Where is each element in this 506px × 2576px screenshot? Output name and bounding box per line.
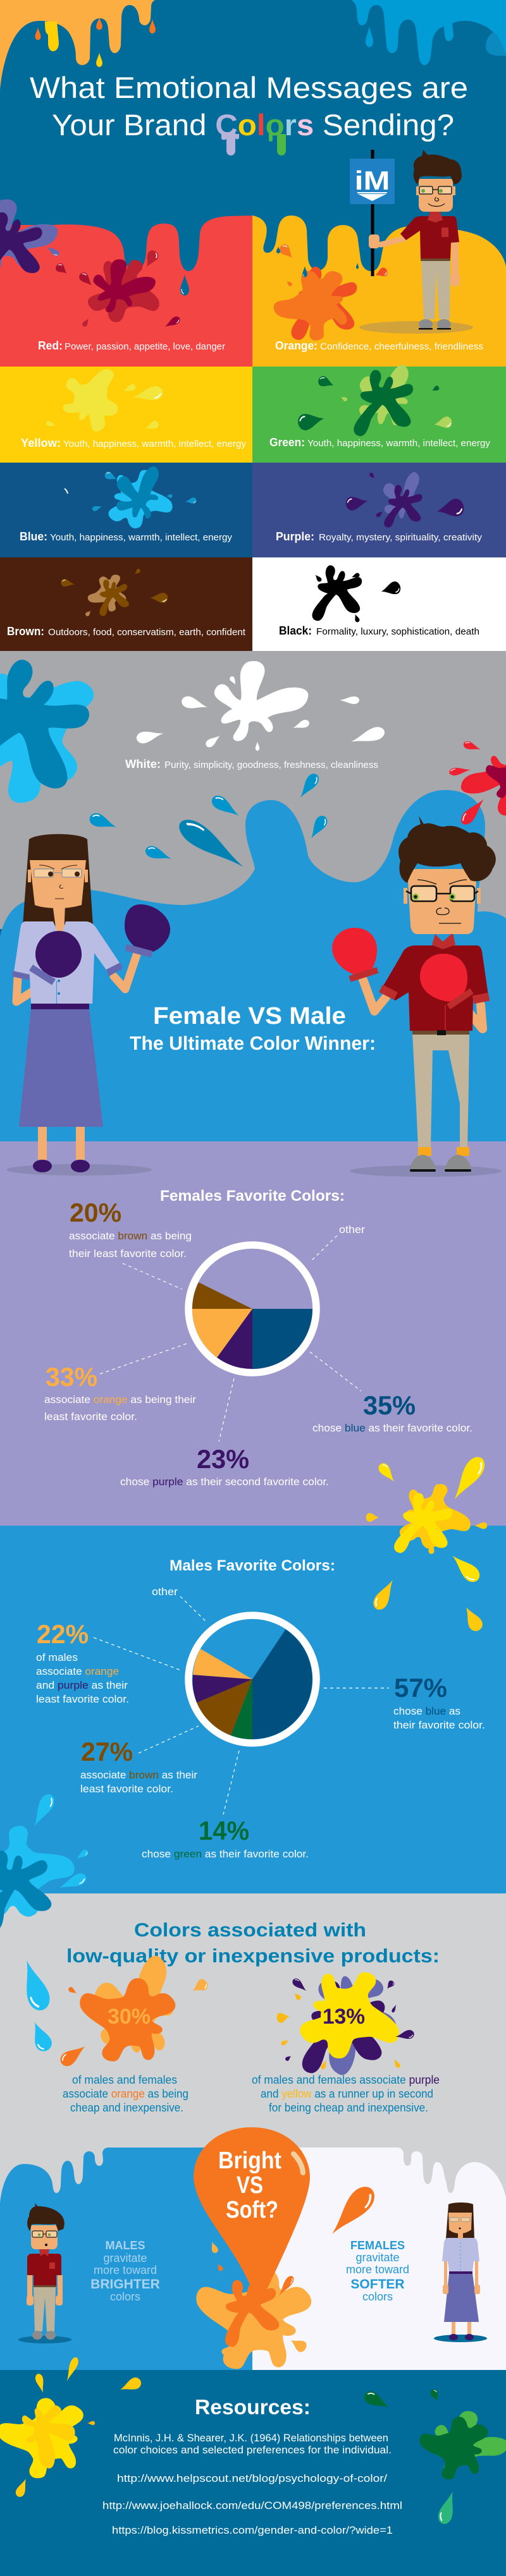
big orange drop with heading: VS xyxy=(237,2172,263,2199)
flying droplets on gray xyxy=(88,740,488,876)
label: other: other xyxy=(339,1224,365,1236)
shirt xyxy=(400,216,459,258)
stat: 14% green: 14% xyxy=(199,1816,249,1845)
females gravitate text: FEMALES xyxy=(350,2239,405,2252)
stat: 33% orange: 33% xyxy=(46,1362,97,1392)
section: low-quality or inexpensive xyxy=(16,1919,440,2114)
blue droplets xyxy=(65,470,197,512)
references xyxy=(102,2432,402,2536)
blue paint splat xyxy=(102,454,177,533)
purple label: Purple: xyxy=(276,530,314,543)
orange splat with 30%: 30% xyxy=(108,2005,151,2029)
blue paint wave xyxy=(0,790,506,1141)
shoes xyxy=(419,319,451,330)
stat: 20% brown: 20% xyxy=(70,1198,121,1227)
glove bands xyxy=(350,970,472,1007)
blue splat left xyxy=(0,641,117,821)
blue droplets xyxy=(16,1957,54,2054)
shadow xyxy=(359,321,473,334)
glove bands xyxy=(31,947,152,982)
yellow splat between sections xyxy=(366,1453,489,1634)
heading: female vs male: The Ultimate Color Winner: xyxy=(130,1032,376,1054)
light orange splat xyxy=(196,2269,311,2369)
hair xyxy=(446,2202,474,2239)
stat: 20% brown: associate brown as being xyxy=(69,1230,192,1242)
panel: white on gray xyxy=(0,641,506,929)
males gravitate text xyxy=(90,2239,160,2303)
label: other: other xyxy=(152,1586,178,1598)
orange panel droplets xyxy=(276,243,388,287)
stat: 57% blue: 57% xyxy=(394,1673,447,1703)
stat: 23% purple: chose purple as their second favorite color. xyxy=(120,1476,329,1488)
description: orange: associate orange as being xyxy=(63,2087,188,2100)
white label: Purity, simplicity, goodness, freshness, cleanliness xyxy=(164,760,378,770)
yellow paint splat xyxy=(59,363,125,434)
shoes xyxy=(33,1160,90,1172)
females gravitate text: SOFTER xyxy=(350,2277,405,2292)
panel: black xyxy=(252,557,506,651)
collar xyxy=(432,933,455,949)
glasses xyxy=(450,2218,470,2221)
skirt xyxy=(19,1009,103,1127)
males gravitate text: more toward xyxy=(94,2264,157,2276)
green label: Green: xyxy=(269,436,305,449)
hair xyxy=(398,816,496,883)
description: orange: of males and females xyxy=(72,2074,177,2086)
title: Your Brand Colors Sending? xyxy=(52,108,454,142)
red label: Power, passion, appetite, love, danger xyxy=(65,342,225,352)
shadow under male xyxy=(350,1165,502,1177)
purple paint splat xyxy=(373,462,436,528)
arms xyxy=(363,980,386,1011)
legs xyxy=(421,260,450,319)
heading: Colors associated with xyxy=(134,1919,366,1941)
males gravitate text: colors xyxy=(110,2290,140,2303)
stat: 27% brown xyxy=(80,1737,197,1795)
pie chart: females xyxy=(188,1245,316,1373)
green splat xyxy=(417,2406,506,2483)
brows, nose and mouth xyxy=(417,880,467,923)
stat: 22% orange and purple: and purple as their xyxy=(36,1679,128,1691)
stat: 14% green xyxy=(142,1816,309,1860)
stat: 27% brown: associate brown as their xyxy=(80,1769,197,1781)
purple label: Royalty, mystery, spirituality, creativity xyxy=(319,533,483,543)
description: orange xyxy=(63,2074,188,2114)
shoes xyxy=(410,1155,471,1172)
references: https://blog.kissmetrics.com/gender-and-color/?wide=1 xyxy=(112,2524,393,2536)
stat: 14% green: chose green as their favorite color. xyxy=(142,1848,309,1860)
heading: female vs male xyxy=(130,1003,376,1054)
blouse xyxy=(442,2238,479,2271)
black paint splat xyxy=(312,566,362,621)
belt xyxy=(412,1030,469,1035)
yellow label xyxy=(21,437,247,449)
green droplets xyxy=(362,2388,459,2526)
stat: 20% brown: their least favorite color. xyxy=(69,1248,187,1260)
blue label xyxy=(20,530,233,543)
red paint splat xyxy=(88,259,159,322)
stat: 22% orange and purple: associate orange xyxy=(36,1665,119,1677)
face xyxy=(419,179,453,212)
trousers xyxy=(412,1034,469,1147)
shoes xyxy=(449,2334,474,2340)
brown label: Outdoors, food, conservatism, earth, confident xyxy=(48,628,245,638)
orange splat with 30% xyxy=(76,1938,202,2070)
white droplets xyxy=(135,676,386,751)
glasses xyxy=(34,869,82,877)
references: http://www.helpscout.net/blog/psychology-of-color/ xyxy=(117,2472,387,2484)
panel: soft side xyxy=(252,2148,506,2370)
description: purple and yellow: for being cheap and inexpensive. xyxy=(269,2101,428,2114)
brown droplets xyxy=(60,568,168,617)
big orange drop with heading: Soft? xyxy=(226,2197,278,2223)
stat: 57% blue: chose blue as xyxy=(393,1705,460,1717)
arms xyxy=(443,2261,480,2294)
glasses xyxy=(419,186,452,194)
panel: females favorite colors background xyxy=(0,1141,506,1526)
yellow and purple splat with 13%: 13% xyxy=(323,2005,365,2029)
stat: 33% orange: associate orange as being their xyxy=(44,1394,196,1406)
white label: White: xyxy=(125,758,161,770)
shirt xyxy=(379,945,488,1031)
yellow and purple splat with 13% xyxy=(293,1962,409,2087)
title: What Emotional Messages are xyxy=(30,71,468,104)
legs xyxy=(452,2321,455,2335)
big orange drop with heading xyxy=(194,2127,310,2310)
sign board: iM xyxy=(354,166,390,195)
orange label: Confidence, cheerfulness, friendliness xyxy=(320,342,483,352)
red label xyxy=(38,339,225,352)
blue splat bottom left xyxy=(0,1811,85,1935)
section: low-quality colors background xyxy=(0,1893,506,2370)
belt xyxy=(31,1004,89,1009)
blue paint drip top right xyxy=(352,0,506,65)
black label: Black: xyxy=(279,624,312,637)
stat: 27% brown: 27% xyxy=(81,1737,133,1766)
shoes xyxy=(32,2331,56,2340)
references: color choices and selected preferences for the individual. xyxy=(113,2444,392,2456)
sign pole xyxy=(371,150,374,276)
purple label xyxy=(276,530,483,543)
legs xyxy=(34,2287,56,2331)
stat: 22% orange and purple: of males xyxy=(36,1651,78,1663)
head xyxy=(448,2213,472,2233)
section: females favorite colors xyxy=(44,1188,472,1488)
socks xyxy=(418,1147,469,1156)
brows, nose and mouth xyxy=(39,865,77,899)
black label xyxy=(279,624,479,637)
stat: 35% blue: 35% xyxy=(363,1390,416,1420)
brown label xyxy=(7,625,245,638)
panel: green xyxy=(252,351,506,463)
title xyxy=(30,71,468,142)
panel: red xyxy=(0,199,252,367)
stat: 33% orange xyxy=(44,1362,196,1423)
panel: blue xyxy=(0,454,252,557)
description: purple and yellow: of males and females associate purple xyxy=(252,2074,440,2086)
stat: 27% brown: least favorite color. xyxy=(80,1783,173,1795)
male boxer xyxy=(332,816,496,1172)
orange droplets xyxy=(58,1978,209,2069)
arm left xyxy=(381,239,404,245)
eyes xyxy=(413,894,455,899)
boxing gloves xyxy=(332,928,467,1002)
panel: purple xyxy=(252,462,506,557)
panel: brown xyxy=(0,557,252,651)
males gravitate text: MALES xyxy=(105,2239,145,2252)
green droplets xyxy=(297,372,453,432)
small female figure xyxy=(434,2202,487,2342)
green label: Youth, happiness, warmth, intellect, energy xyxy=(307,439,491,449)
description: orange: cheap and inexpensive. xyxy=(70,2101,183,2114)
orange label xyxy=(275,339,483,352)
collar xyxy=(428,212,443,222)
cuffs xyxy=(381,988,489,1000)
nose and mouth xyxy=(428,197,445,206)
panel: yellow xyxy=(0,363,252,463)
dark orange splat xyxy=(215,2274,284,2348)
hair xyxy=(23,834,93,925)
females gravitate text: more toward xyxy=(346,2263,409,2276)
red splat right xyxy=(461,748,506,816)
females gravitate text: colors xyxy=(362,2290,393,2303)
stat: 57% blue xyxy=(393,1673,485,1731)
yellow droplets xyxy=(46,374,164,432)
neck xyxy=(52,904,65,937)
orange paint drip top left xyxy=(0,0,156,90)
heading: female vs male: Female VS Male xyxy=(153,1003,346,1030)
orange droplets xyxy=(209,2182,380,2357)
background: dark blue header xyxy=(0,0,506,379)
title paint drips xyxy=(221,133,286,155)
arms xyxy=(27,2275,63,2306)
section: males favorite colors xyxy=(28,1557,485,1893)
panel: males favorite colors background xyxy=(0,1526,506,1893)
glasses xyxy=(406,886,478,901)
females gravitate text: gravitate xyxy=(355,2251,400,2264)
brown paint splat xyxy=(82,568,134,619)
blouse xyxy=(14,921,120,1004)
man holding IM sign xyxy=(350,150,473,334)
stat: 23% purple xyxy=(120,1444,329,1488)
legs xyxy=(38,1125,47,1160)
panel: resources xyxy=(0,2356,506,2576)
description: purple and yellow xyxy=(252,2074,440,2114)
females gravitate text xyxy=(346,2239,409,2303)
boxing gloves xyxy=(35,904,170,978)
leader lines xyxy=(100,1236,361,1442)
female boxer xyxy=(12,834,170,1172)
stat: 35% blue xyxy=(312,1390,472,1434)
face xyxy=(30,860,86,908)
males gravitate text: BRIGHTER xyxy=(90,2277,160,2292)
panel: orange xyxy=(252,216,506,367)
description: purple and yellow: and yellow as a runner up in second xyxy=(261,2087,433,2100)
cuffs xyxy=(12,963,123,980)
shirt xyxy=(27,2254,61,2287)
heading xyxy=(66,1919,440,1967)
shadow under female xyxy=(6,1164,152,1176)
stat: 35% blue: chose blue as their favorite color. xyxy=(312,1422,472,1434)
purple droplets xyxy=(345,472,466,520)
black label: Formality, luxury, sophistication, death xyxy=(316,627,479,637)
panel: bright side xyxy=(0,2148,252,2370)
stat: 23% purple: 23% xyxy=(197,1444,249,1474)
stat: 22% orange and purple xyxy=(36,1619,129,1705)
references: McInnis, J.H. & Shearer, J.K. (1964) Relationships between xyxy=(114,2432,388,2444)
leader lines xyxy=(94,1596,389,1814)
purple paint splat xyxy=(0,199,58,283)
yellow and purple droplets xyxy=(276,1977,415,2070)
head xyxy=(31,2225,58,2249)
arms xyxy=(16,978,43,1002)
skirt xyxy=(444,2273,479,2322)
black droplets xyxy=(314,573,402,623)
heading: low-quality or inexpensive products: xyxy=(66,1945,440,1967)
yellow label: Yellow: xyxy=(21,437,61,449)
stat: 20% brown xyxy=(69,1198,192,1260)
blue label: Youth, happiness, warmth, intellect, energy xyxy=(50,533,233,543)
white paint splat xyxy=(214,661,308,741)
stat: 57% blue: their favorite color. xyxy=(393,1719,485,1731)
pie chart: males xyxy=(188,1615,316,1743)
green label xyxy=(269,436,491,449)
orange paint splat xyxy=(265,257,364,352)
heading: Resources: xyxy=(195,2395,311,2419)
yellow droplets xyxy=(14,2356,143,2498)
face xyxy=(407,869,477,934)
stat: 22% orange and purple: least favorite color. xyxy=(36,1693,129,1705)
orange label: Orange: xyxy=(275,339,318,352)
heading: Males Favorite Colors: xyxy=(170,1557,335,1574)
yellow label: Youth, happiness, warmth, intellect, energy xyxy=(63,439,247,449)
stat: 33% orange: least favorite color. xyxy=(44,1411,137,1423)
hair xyxy=(414,150,462,185)
stat: 22% orange and purple: 22% xyxy=(37,1619,89,1649)
green paint splat xyxy=(345,351,429,437)
white label xyxy=(125,758,378,770)
blue droplets xyxy=(28,1792,89,1893)
small male figure xyxy=(18,2203,71,2343)
big orange drop with heading: Bright xyxy=(218,2148,281,2174)
glasses xyxy=(32,2231,57,2237)
brown label: Brown: xyxy=(7,625,44,638)
yellow droplets xyxy=(366,1453,489,1634)
blue label: Blue: xyxy=(20,530,47,543)
males gravitate text: gravitate xyxy=(103,2252,147,2264)
references: http://www.joehallock.com/edu/COM498/preferences.html xyxy=(102,2500,402,2512)
red label: Red: xyxy=(38,339,63,352)
red panel droplets xyxy=(45,245,189,330)
yellow splat xyxy=(0,2390,96,2486)
sign board xyxy=(350,159,395,204)
heading: Females Favorite Colors: xyxy=(160,1188,345,1205)
